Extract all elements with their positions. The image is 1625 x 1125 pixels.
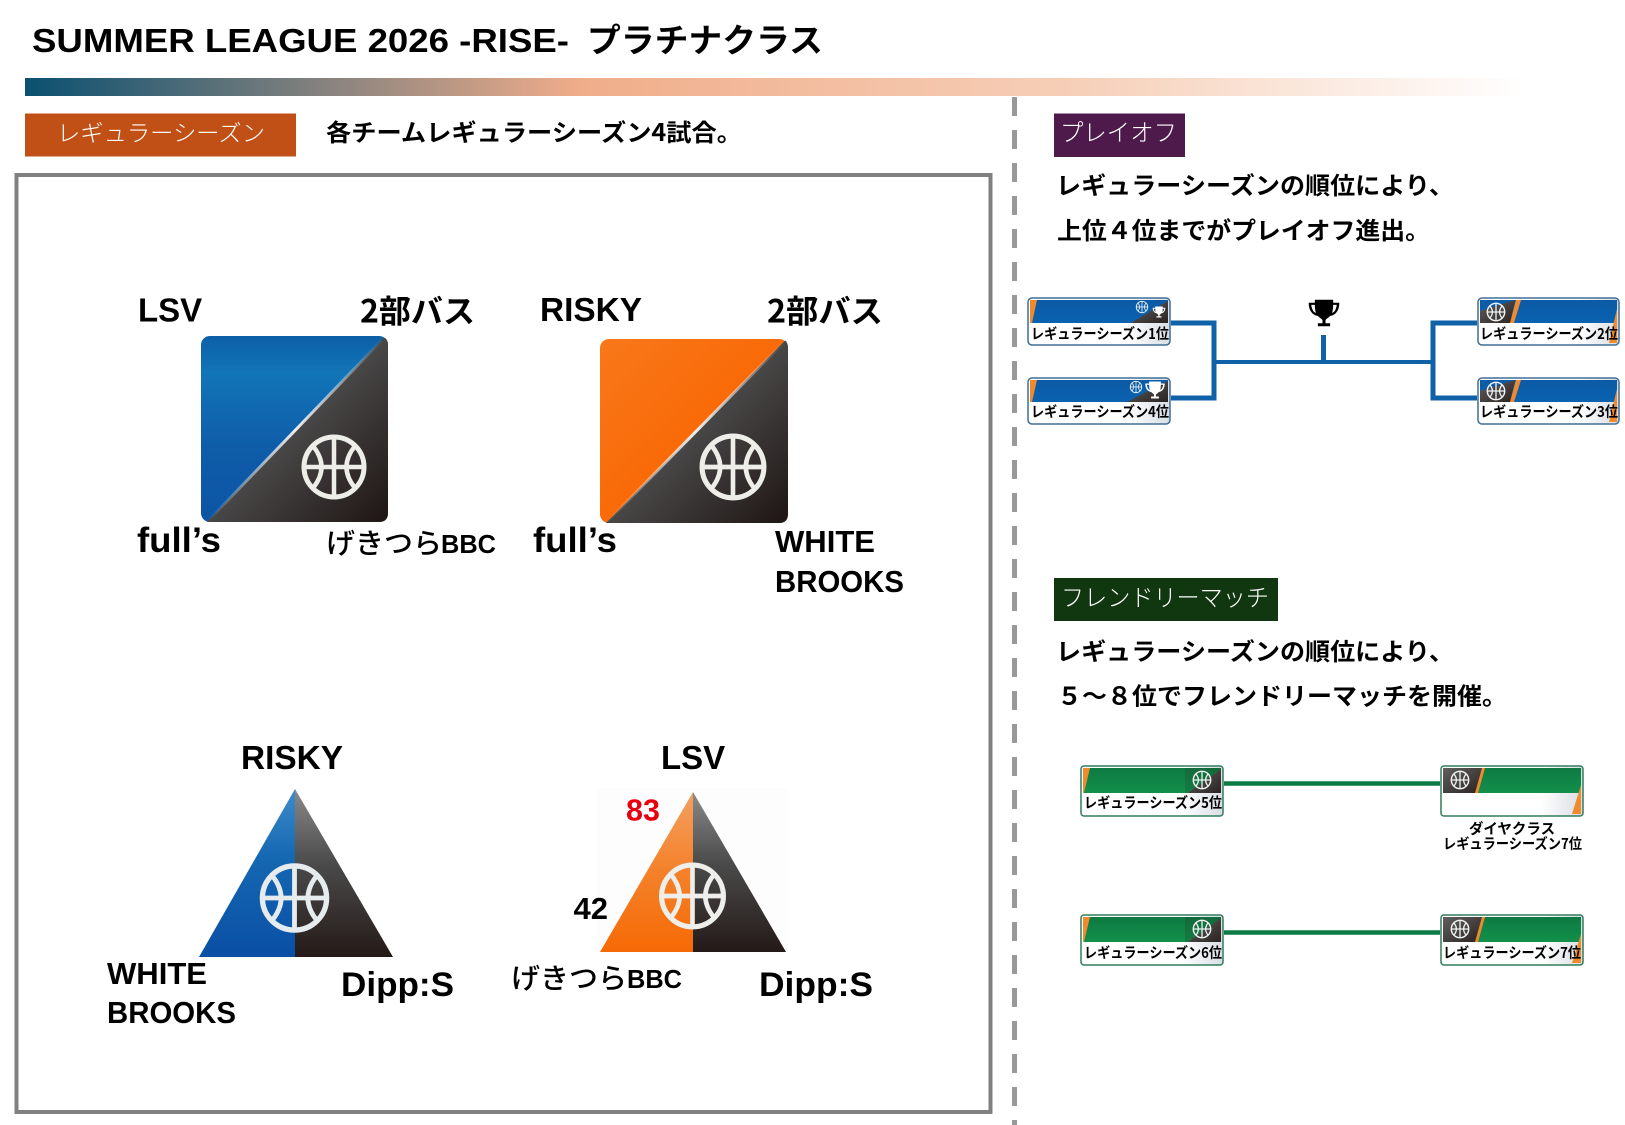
card: season 5th — [1081, 766, 1223, 816]
team label: WHITE BROOKS: WHITE — [775, 525, 875, 559]
team label: Dipp:S: Dipp:S — [341, 966, 454, 1004]
card: blank opponent — [1441, 766, 1583, 816]
connector line — [1224, 930, 1440, 935]
friendly match description: ５～８位でフレンドリーマッチを開催。 — [1057, 676, 1507, 712]
team label: full's: full’s — [533, 521, 617, 560]
title — [32, 14, 823, 62]
team label: WHITE BROOKS: BROOKS — [107, 996, 236, 1030]
opponent caption: ダイヤクラス — [1469, 818, 1555, 839]
triangle icon blue and dark — [199, 789, 393, 957]
title: SUMMER LEAGUE 2026 -RISE- — [32, 22, 569, 59]
playoff bracket — [1028, 298, 1619, 424]
card: season 4th: レギュラーシーズン4位 — [1031, 401, 1169, 422]
card: season 4th — [1028, 378, 1170, 424]
card: season 7th — [1441, 915, 1583, 965]
title: プラチナクラス — [587, 14, 823, 62]
team label: 2部バス: 2部バス — [767, 286, 883, 332]
card: season 5th: レギュラーシーズン5位 — [1084, 792, 1222, 813]
playoff description — [1056, 166, 1454, 246]
team label: げきつらBBC — [511, 957, 682, 997]
team label: WHITE BROOKS: WHITE — [107, 957, 207, 991]
card: season 6th: レギュラーシーズン6位 — [1084, 942, 1222, 963]
section: regular season heading — [25, 114, 296, 156]
team label: 2部バス: 2部バス — [360, 286, 475, 332]
friendly match description — [1056, 632, 1507, 712]
group A square — [137, 286, 496, 562]
card: season 2nd — [1478, 298, 1619, 345]
opponent caption — [1443, 818, 1582, 854]
team label: Dipp:S: Dipp:S — [759, 966, 873, 1004]
section: playoff heading: プレイオフ — [1060, 113, 1177, 148]
score: 42: 42 — [574, 891, 608, 926]
group D triangle — [511, 739, 873, 1004]
card: season 3rd — [1478, 378, 1619, 424]
team label: げきつらBBC: げきつら — [511, 957, 627, 997]
playoff description: 上位４位までがプレイオフ進出。 — [1057, 211, 1430, 246]
playoff description: レギュラーシーズンの順位により、 — [1056, 166, 1454, 201]
team label: LSV: LSV — [661, 739, 725, 776]
connector line — [1224, 781, 1440, 786]
team label: げきつらBBC: BBC — [627, 964, 682, 994]
icon: trophy — [1309, 300, 1339, 326]
team label: RISKY: RISKY — [241, 739, 343, 776]
team label: げきつらBBC: BBC — [441, 529, 496, 559]
team label: げきつらBBC — [326, 522, 496, 562]
header gradient bar — [25, 78, 1525, 96]
bracket lines — [1171, 323, 1477, 398]
square icon orange and dark — [600, 339, 788, 523]
triangle icon orange and dark — [597, 788, 788, 953]
divider: dashed vertical — [1012, 97, 1017, 1125]
group B square — [533, 286, 904, 599]
team label: full's: full’s — [137, 521, 221, 560]
friendly match 2 — [1081, 915, 1583, 965]
opponent caption: レギュラーシーズン7位 — [1443, 833, 1582, 854]
team label: LSV: LSV — [138, 292, 202, 328]
friendly match description: レギュラーシーズンの順位により、 — [1056, 632, 1454, 667]
section: regular season heading: レギュラーシーズン — [57, 114, 265, 148]
score: 83: 83 — [626, 794, 660, 828]
card: season 1st: レギュラーシーズン1位 — [1031, 323, 1169, 344]
team label: WHITE BROOKS — [775, 525, 904, 599]
regular season description: 各チームレギュラーシーズン4試合。 — [326, 113, 742, 148]
team label: WHITE BROOKS: BROOKS — [775, 565, 904, 599]
team label: WHITE BROOKS — [107, 957, 236, 1030]
panel: regular season matchups — [16, 175, 990, 1112]
card: season 7th: レギュラーシーズン7位 — [1443, 942, 1581, 963]
square icon blue and dark — [201, 336, 388, 522]
friendly match 1 — [1081, 766, 1583, 854]
team label: RISKY: RISKY — [540, 291, 642, 328]
group C triangle — [107, 739, 454, 1030]
card: season 1st — [1028, 298, 1170, 345]
card: season 6th — [1081, 915, 1223, 965]
section: friendly match heading: フレンドリーマッチ — [1061, 578, 1269, 613]
team label: げきつらBBC: げきつら — [326, 522, 442, 562]
